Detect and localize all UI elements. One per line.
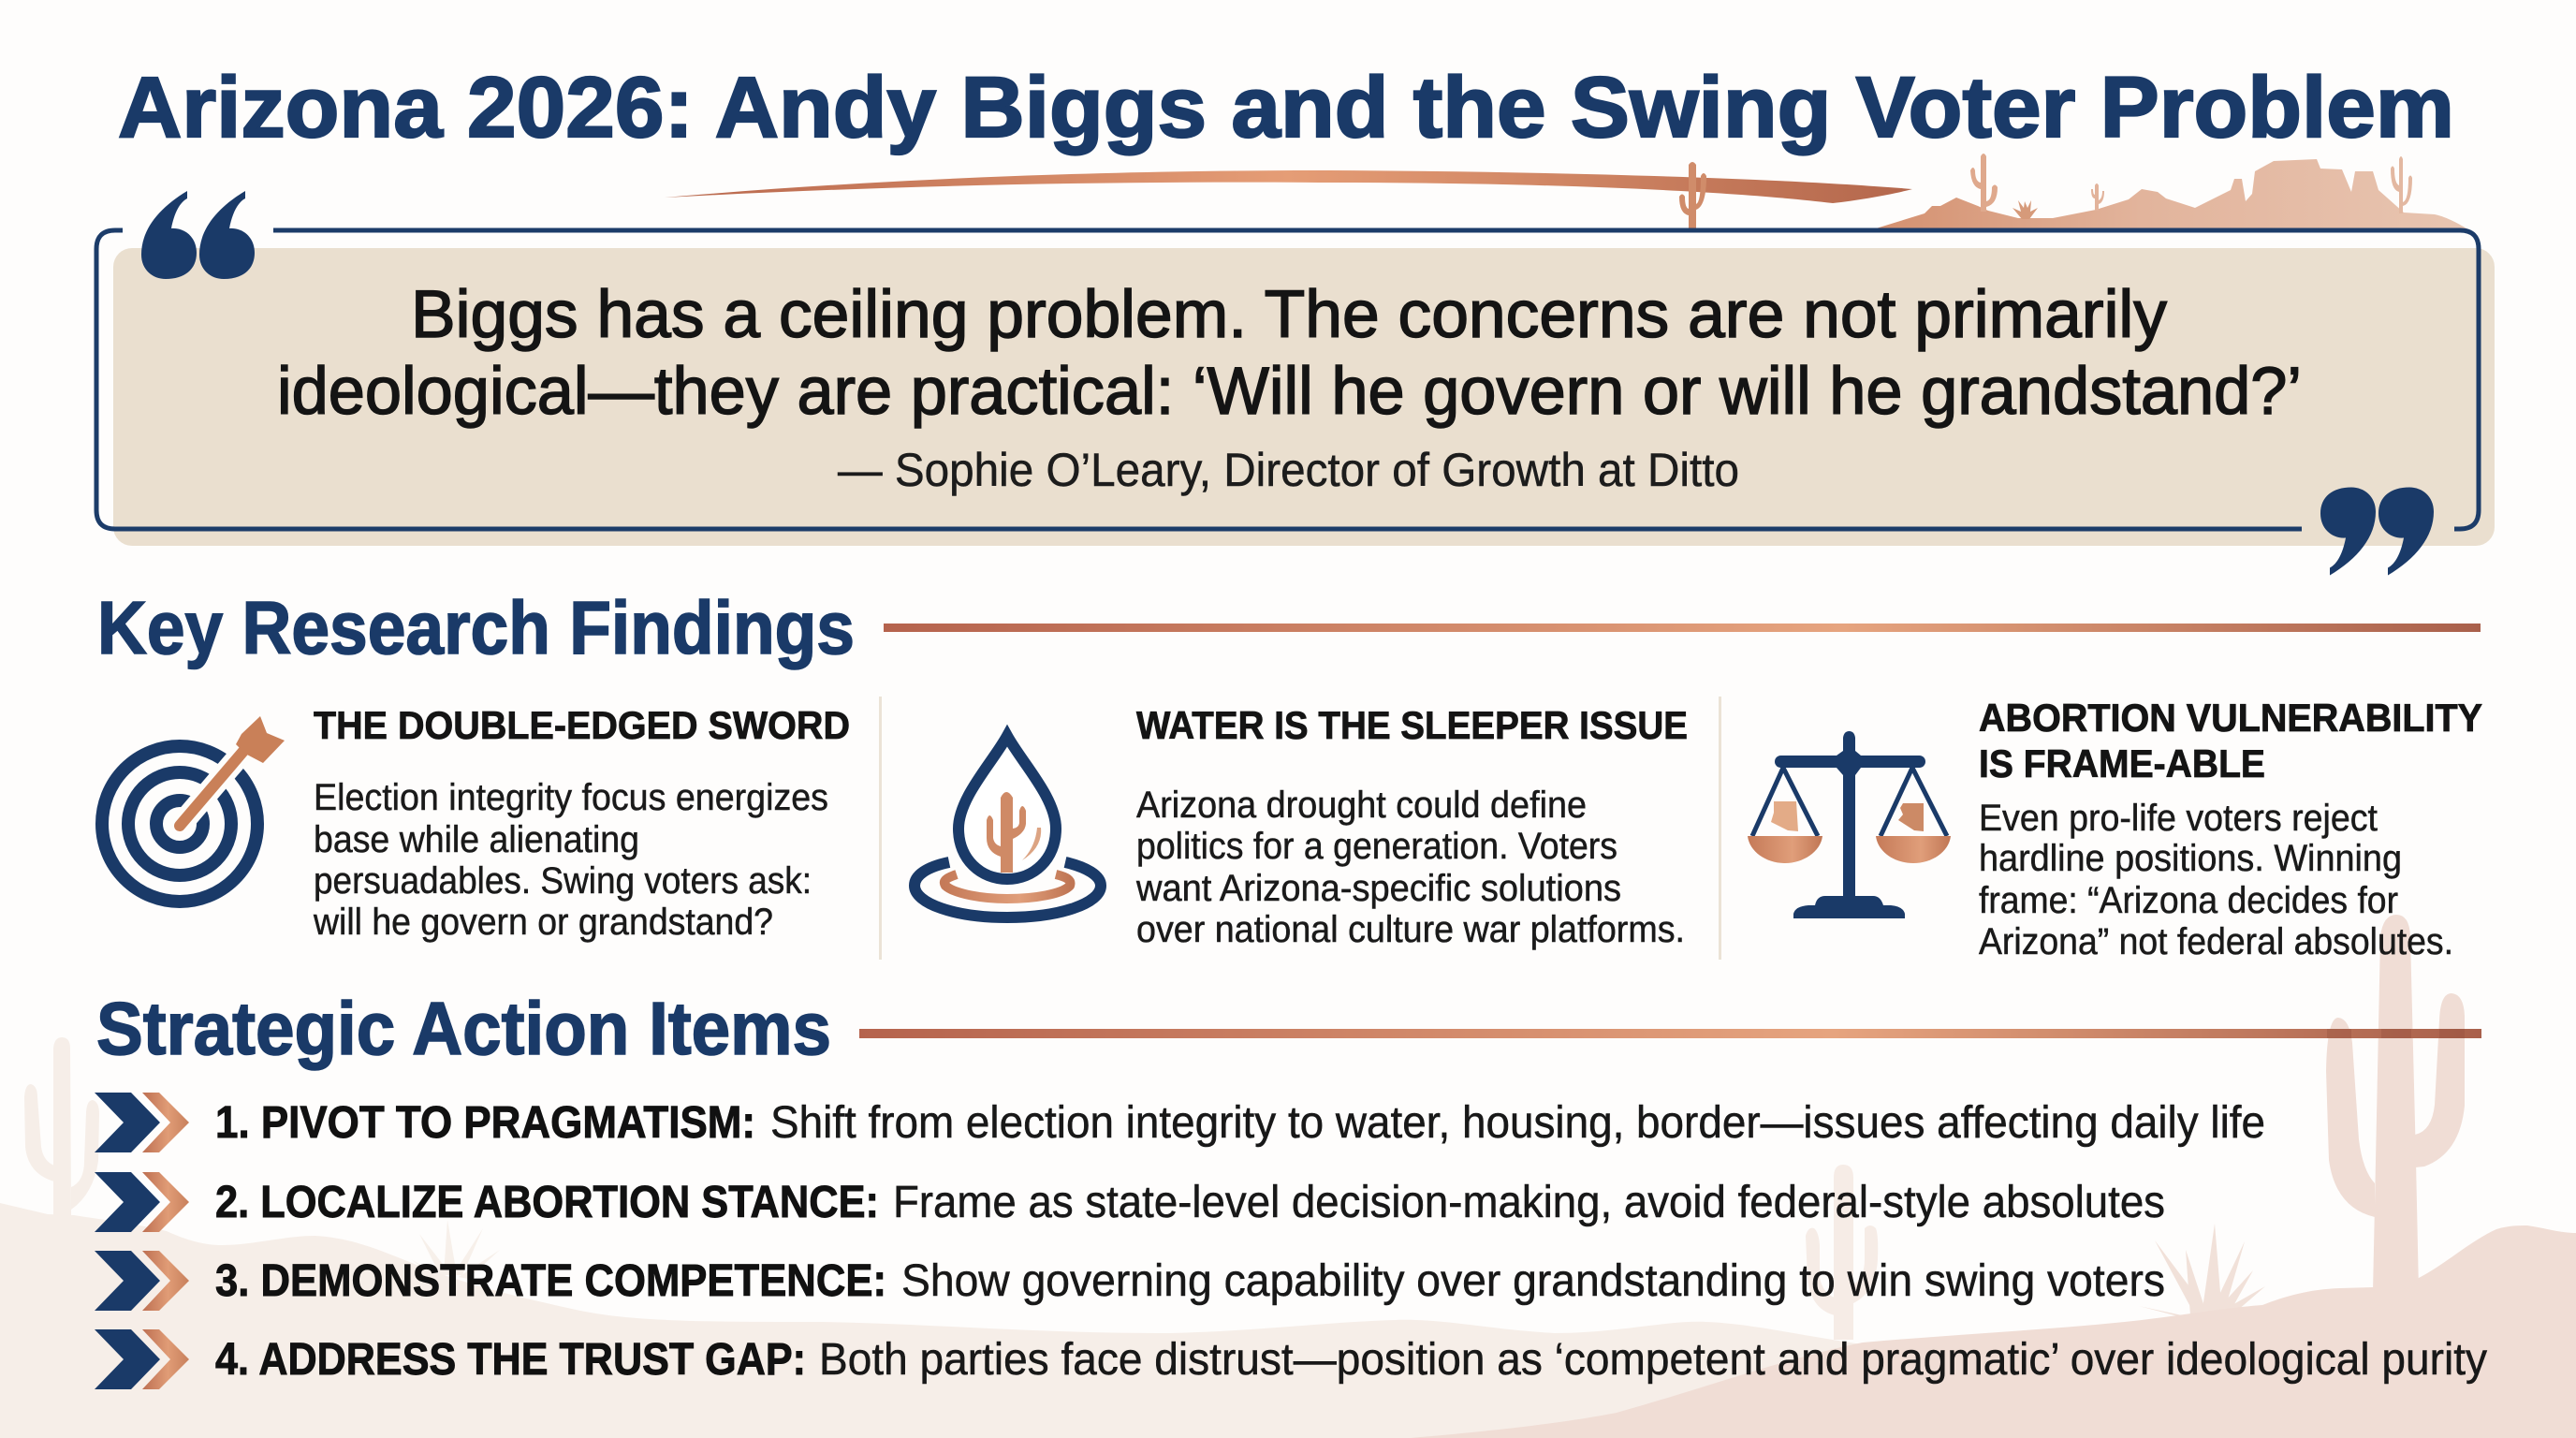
finding body: Arizona drought could define	[1136, 785, 1587, 826]
finding body	[1979, 798, 2453, 962]
finding body: want Arizona-specific solutions	[1135, 868, 1621, 909]
panel: double-edged sword	[102, 703, 850, 943]
quote background card	[113, 248, 2495, 546]
action item 2: Frame as state-level decision-making, avoid federal-style absolutes	[893, 1178, 2165, 1227]
list: strategic action items	[95, 1093, 2487, 1389]
finding heading: WATER IS THE SLEEPER ISSUE	[1136, 703, 1688, 747]
icon: opening quotation mark	[141, 191, 255, 279]
icon: closing quotation mark	[2320, 487, 2434, 575]
finding heading: IS FRAME-ABLE	[1979, 741, 2265, 785]
left agave background	[411, 1220, 500, 1281]
icon: double chevron	[95, 1251, 189, 1311]
left cactus background	[24, 1037, 99, 1217]
quote text: Biggs has a ceiling problem. The concerns are not primarily	[411, 278, 2168, 352]
right large cactus background	[2326, 915, 2465, 1292]
action item 4	[95, 1329, 2487, 1389]
action item 3	[95, 1251, 2165, 1311]
icon: double chevron	[95, 1093, 189, 1152]
icon: double chevron	[95, 1172, 189, 1232]
key findings rule	[884, 624, 2481, 632]
icon: target with arrow	[102, 716, 285, 902]
quote attribution: — Sophie O’Leary, Director of Growth at Ditto	[838, 444, 1739, 496]
action item 1: Shift from election integrity to water, housing, border—issues affecting daily life	[770, 1098, 2265, 1148]
finding body: over national culture war platforms.	[1136, 909, 1685, 950]
finding body: Even pro-life voters reject	[1979, 798, 2378, 839]
finding body: politics for a generation. Voters	[1136, 826, 1617, 867]
finding body: Election integrity focus energizes	[314, 777, 828, 818]
title: Arizona 2026: Andy Biggs and the Swing Voter Problem	[118, 60, 2454, 155]
heading: strategic action items: Strategic Action Items	[96, 987, 831, 1070]
middle cactus background	[1806, 1165, 1878, 1340]
finding body: hardline positions. Winning	[1979, 838, 2402, 879]
finding body: persuadables. Swing voters ask:	[314, 860, 812, 902]
action item 1: 1. PIVOT TO PRAGMATISM:	[215, 1098, 755, 1148]
title swoosh	[665, 170, 1912, 203]
panel: pull quote	[96, 191, 2495, 575]
finding body: base while alienating	[314, 819, 639, 860]
icon: double chevron	[95, 1329, 189, 1389]
finding body: will he govern or grandstand?	[313, 902, 773, 943]
icon: water drop with cactus	[915, 736, 1101, 917]
desert skyline decoration	[1679, 154, 2468, 229]
quote border	[96, 230, 2479, 529]
right agave background	[2139, 1224, 2265, 1322]
action item 3: Show governing capability over grandstanding to win swing voters	[901, 1256, 2165, 1306]
desert background: sand hills	[0, 1203, 2576, 1438]
panel: water is the sleeper issue	[915, 703, 1688, 950]
heading: key research findings: Key Research Findings	[97, 586, 855, 669]
action item 4: Both parties face distrust—position as ‘competent and pragmatic’ over ideological purity	[819, 1335, 2487, 1385]
quote text: ideological—they are practical: ‘Will he govern or will he grandstand?’	[277, 355, 2302, 429]
action item 3: 3. DEMONSTRATE COMPETENCE:	[215, 1256, 886, 1306]
icon: balance scales with Arizona shapes	[1748, 731, 1951, 918]
finding heading	[1979, 696, 2482, 785]
action item 2	[95, 1172, 2165, 1232]
action item 1	[95, 1093, 2265, 1152]
finding body	[1135, 785, 1685, 950]
action item 4: 4. ADDRESS THE TRUST GAP:	[215, 1335, 806, 1385]
action item 2: 2. LOCALIZE ABORTION STANCE:	[215, 1178, 879, 1227]
finding body: Arizona” not federal absolutes.	[1979, 921, 2453, 962]
finding heading: THE DOUBLE-EDGED SWORD	[314, 703, 850, 747]
divider	[879, 697, 882, 960]
divider	[1719, 697, 1721, 960]
finding body	[313, 777, 828, 943]
finding heading: ABORTION VULNERABILITY	[1979, 696, 2482, 740]
finding body: frame: “Arizona decides for	[1979, 880, 2398, 921]
panel: abortion vulnerability	[1748, 696, 2482, 962]
strategic rule	[859, 1029, 2481, 1038]
quote text	[277, 278, 2302, 429]
